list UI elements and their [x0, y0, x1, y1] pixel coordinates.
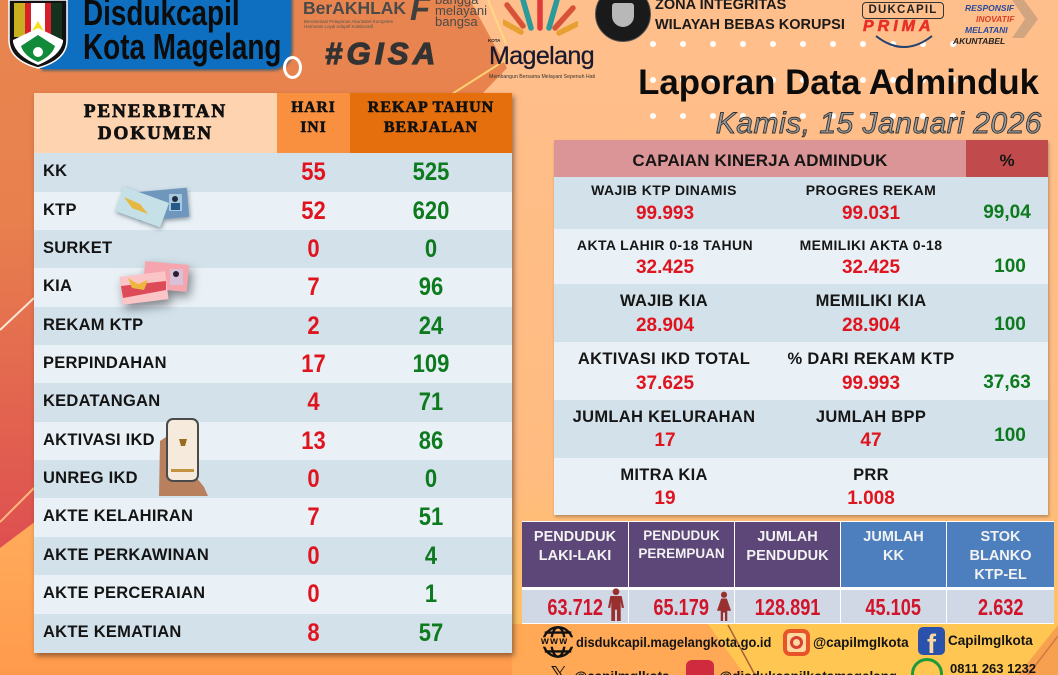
stat value: jumlah penduduk: 128.891: [755, 594, 820, 620]
row: wajib KTP dinamis: PROGRES REKAM: [806, 182, 936, 198]
row: KEDATANGAN: KEDATANGAN: [43, 392, 160, 410]
logo: Magelang: Membangun Bersama Melayani Sepenuh Hati: [489, 74, 595, 80]
stat value: jumlah penduduk: [735, 590, 841, 623]
header: penerbitan dokumen: PENERBITAN: [84, 101, 227, 122]
stat header: perempuan: PENDUDUK: [643, 528, 720, 543]
row: mitra KIA: PRR: [853, 466, 889, 484]
row: KIA: [34, 268, 512, 306]
logo: Dukcapil Prima: [862, 2, 944, 48]
row: AKTE PERCERAIAN: [34, 575, 512, 614]
row: AKTE PERCERAIAN: 1: [425, 580, 437, 608]
row: KTP: KTP: [43, 200, 77, 218]
row: wajib KIA: [554, 284, 1048, 342]
row: KEDATANGAN: [34, 383, 512, 422]
row: KIA: KIA: [43, 277, 72, 295]
row: aktivasi IKD: [554, 342, 1048, 400]
stat header: perempuan: [629, 522, 735, 587]
row: mitra KIA: 19: [654, 488, 676, 509]
row: AKTE KEMATIAN: [34, 614, 512, 652]
stat value: jumlah KK: [841, 590, 947, 623]
row: AKTE KELAHIRAN: [34, 498, 512, 536]
row: AKTE PERKAWINAN: [34, 536, 512, 575]
social: instagram: @capilmglkota: [813, 635, 909, 650]
row: KTP: 52: [301, 196, 326, 224]
row: wajib KIA: WAJIB KIA: [620, 292, 708, 310]
row: AKTE KEMATIAN: 8: [307, 618, 320, 646]
logo: Dukcapil Prima: PRIMA: [863, 18, 935, 35]
row: KTP: 620: [413, 196, 449, 224]
hashtag GISA: #GISA: [325, 36, 440, 71]
social: youtube: [686, 660, 896, 675]
icon: female: [717, 592, 731, 621]
row: AKTIVASI IKD: AKTIVASI IKD: [43, 430, 155, 448]
header: penerbitan dokumen: [34, 93, 277, 153]
row: mitra KIA: [554, 458, 1048, 515]
stat value: stok: 2.632: [978, 594, 1023, 620]
stat header: perempuan: PEREMPUAN: [638, 546, 725, 561]
logos: BerAKHLAK and bangga melayani: Harmonis Loyal Adaptif Kolaboratif: [304, 24, 373, 29]
row: akta lahir: 32.425: [842, 257, 900, 278]
row: wajib KTP dinamis: WAJIB KTP DINAMIS: [591, 182, 737, 198]
row: jumlah kelurahan: 17: [654, 430, 676, 451]
row: wajib KIA: 28.904: [842, 315, 900, 336]
header: rekap tahun berjalan: [350, 93, 512, 153]
row: wajib KIA: 100: [994, 314, 1026, 335]
row: jumlah kelurahan: JUMLAH BPP: [816, 408, 926, 426]
stat header: stok blanko: KTP-EL: [974, 567, 1027, 583]
stat header: jumlah penduduk: [735, 522, 841, 587]
stat header: laki-laki: [522, 522, 629, 587]
row: UNREG IKD: [34, 460, 512, 498]
row: AKTE PERKAWINAN: 4: [425, 542, 437, 570]
stat header: jumlah KK: [841, 522, 947, 587]
logo: Dukcapil Prima: DUKCAPIL: [868, 4, 938, 16]
row: AKTE KELAHIRAN: 51: [419, 503, 443, 531]
social: website: disdukcapil.magelangkota.go.id: [576, 634, 771, 650]
row: wajib KIA: 28.904: [636, 315, 694, 336]
social: whatsapp: [911, 658, 1036, 675]
row: AKTIVASI IKD: [34, 422, 512, 460]
values list: MELATANI: [965, 25, 1008, 35]
icon: city crest: [8, 0, 68, 69]
row: wajib KIA: MEMILIKI KIA: [816, 292, 926, 310]
stat header: laki-laki: LAKI-LAKI: [539, 548, 611, 564]
row: akta lahir: AKTA LAHIR 0-18 TAHUN: [577, 237, 753, 253]
social: instagram: [783, 629, 909, 656]
row: AKTE KEMATIAN: AKTE KEMATIAN: [43, 622, 182, 640]
header: hari ini: INI: [300, 119, 327, 136]
stat header: laki-laki: PENDUDUK: [534, 529, 616, 545]
stat value: stok: [947, 590, 1054, 623]
stat value: laki-laki: [522, 590, 629, 623]
header: percent: [966, 140, 1048, 177]
row: mitra KIA: MITRA KIA: [620, 466, 708, 484]
social: website: [541, 626, 771, 658]
row: UNREG IKD: 0: [425, 465, 437, 493]
zona integritas text: [655, 0, 845, 33]
row: AKTE PERKAWINAN: 0: [307, 542, 320, 570]
header: capaian kinerja: [554, 140, 966, 177]
stat header: stok blanko: STOK: [980, 529, 1021, 545]
panel: penerbitan dokumen table: [32, 92, 518, 660]
row: akta lahir: [554, 229, 1048, 284]
row: aktivasi IKD: 37.625: [636, 373, 694, 394]
row: AKTE PERCERAIAN: AKTE PERCERAIAN: [43, 584, 205, 602]
row: mitra KIA: 1.008: [847, 488, 895, 509]
values list: AKUNTABEL: [953, 36, 1005, 46]
logo: Magelang: Magelang: [489, 42, 594, 70]
row: AKTIVASI IKD: 13: [301, 426, 326, 454]
row: AKTE PERCERAIAN: 0: [307, 580, 320, 608]
row: wajib KTP dinamis: 99,04: [983, 202, 1031, 223]
row: KEDATANGAN: 4: [307, 388, 320, 416]
row: KK: 525: [413, 158, 449, 186]
row: wajib KTP dinamis: 99.031: [842, 203, 900, 224]
header: penerbitan dokumen: DOKUMEN: [98, 123, 213, 144]
logo: Magelang: [488, 0, 595, 80]
row: aktivasi IKD: % DARI REKAM KTP: [787, 350, 955, 368]
row: KK: KK: [43, 162, 67, 180]
row: KTP: [34, 192, 512, 230]
row: SURKET: 0: [307, 235, 320, 263]
row: AKTE PERKAWINAN: AKTE PERKAWINAN: [43, 546, 209, 564]
row: PERPINDAHAN: [34, 345, 512, 384]
logos: BerAKHLAK and bangga melayani: Berorientasi Pelayanan Akuntabel Kompeten: [304, 19, 393, 24]
row: REKAM KTP: REKAM KTP: [43, 316, 143, 334]
row: PERPINDAHAN: PERPINDAHAN: [43, 354, 167, 372]
icon: male: [608, 588, 624, 621]
logo: Magelang: KOTA: [488, 38, 500, 43]
stat header: stok blanko: [947, 522, 1054, 587]
row: wajib KTP dinamis: 99.993: [636, 203, 694, 224]
row: KK: 55: [301, 158, 326, 186]
header: rekap tahun berjalan: BERJALAN: [384, 119, 478, 136]
banner: Disdukcapil Kota Magelang: Kota Magelang: [83, 26, 281, 67]
row: SURKET: 0: [425, 235, 437, 263]
panel: capaian kinerja adminduk: [554, 140, 1048, 515]
social: facebook: [918, 627, 1033, 655]
row: UNREG IKD: 0: [307, 465, 320, 493]
logos: BerAKHLAK and bangga melayani: [303, 0, 487, 29]
row: AKTE KELAHIRAN: 7: [307, 503, 320, 531]
row: AKTIVASI IKD: 86: [419, 426, 443, 454]
date: Kamis, 15 Januari 2026: [716, 107, 1042, 140]
icon: hand holding phone: [159, 418, 208, 496]
row: KEDATANGAN: 71: [419, 388, 443, 416]
stat value: perempuan: 65.179: [654, 594, 709, 620]
social: facebook: Capilmglkota: [948, 633, 1033, 648]
icon: KIA cards: [116, 260, 198, 316]
social: website: www: [541, 636, 569, 647]
row: PERPINDAHAN: 17: [301, 350, 326, 378]
row: jumlah kelurahan: 47: [860, 430, 882, 451]
logo: Zona Integritas badge: [595, 0, 651, 42]
row: akta lahir: 32.425: [636, 257, 694, 278]
row: wajib KTP dinamis: [554, 177, 1048, 229]
stat header: jumlah penduduk: JUMLAH: [757, 529, 818, 545]
row: PERPINDAHAN: 109: [413, 350, 449, 378]
row: KIA: 96: [419, 273, 443, 301]
header: rekap tahun berjalan: REKAP TAHUN: [368, 99, 494, 116]
row: akta lahir: 100: [994, 256, 1026, 277]
row: SURKET: SURKET: [43, 239, 112, 257]
row: REKAM KTP: [34, 306, 512, 345]
banner: Disdukcapil Kota Magelang: [40, 0, 291, 69]
stat value: laki-laki: 63.712: [547, 594, 603, 620]
row: REKAM KTP: 24: [419, 312, 443, 340]
header: capaian kinerja: CAPAIAN KINERJA ADMINDUK: [632, 151, 888, 170]
stat header: jumlah KK: JUMLAH: [863, 529, 924, 545]
logos: BerAKHLAK and bangga melayani: bangsa: [435, 14, 478, 29]
header: hari ini: [277, 93, 350, 153]
row: SURKET: [34, 230, 512, 268]
row: jumlah kelurahan: JUMLAH KELURAHAN: [573, 408, 755, 426]
title: Laporan Data Adminduk: [638, 63, 1039, 102]
icon: banner ring: [283, 56, 302, 79]
row: jumlah kelurahan: 100: [994, 425, 1026, 446]
row: AKTE KEMATIAN: 57: [419, 618, 443, 646]
panel: population stats: [522, 521, 1054, 624]
row: KIA: 7: [307, 273, 320, 301]
row: KK: [34, 153, 512, 192]
values list: [952, 0, 1038, 46]
values list: RESPONSIF: [965, 3, 1014, 13]
stat header: jumlah penduduk: PENDUDUK: [746, 548, 829, 564]
logos: BerAKHLAK and bangga melayani: melayani: [435, 3, 487, 18]
row: aktivasi IKD: 99.993: [842, 373, 900, 394]
row: jumlah kelurahan: [554, 400, 1048, 458]
row: REKAM KTP: 2: [307, 312, 320, 340]
zona integritas text: WILAYAH BEBAS KORUPSI: [655, 17, 845, 33]
icon: KTP cards: [114, 186, 193, 231]
stat header: jumlah KK: KK: [883, 548, 904, 564]
row: AKTE KELAHIRAN: AKTE KELAHIRAN: [43, 507, 193, 525]
header: percent: %: [999, 151, 1015, 170]
stat header: stok blanko: BLANKO: [969, 548, 1032, 564]
row: aktivasi IKD: 37,63: [983, 372, 1031, 393]
row: aktivasi IKD: AKTIVASI IKD TOTAL: [578, 350, 750, 368]
row: akta lahir: MEMILIKI AKTA 0-18: [800, 237, 942, 253]
social: X: [550, 663, 670, 675]
values list: INOVATIF: [976, 14, 1014, 24]
header: hari ini: HARI: [291, 99, 336, 116]
stat value: perempuan: [629, 590, 735, 623]
row: UNREG IKD: UNREG IKD: [43, 469, 138, 487]
stat value: jumlah KK: 45.105: [866, 594, 921, 620]
